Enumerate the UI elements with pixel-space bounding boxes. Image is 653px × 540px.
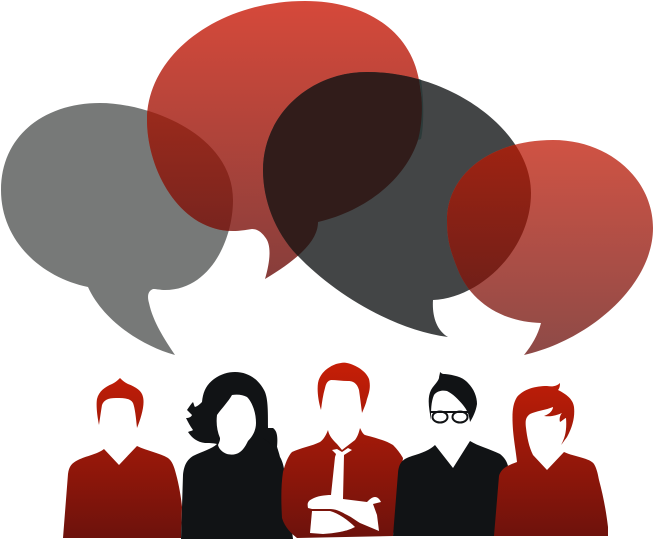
face <box>217 395 256 455</box>
body <box>63 446 182 538</box>
person 5: woman with red hair <box>494 383 608 536</box>
hair <box>318 363 370 413</box>
body <box>393 441 508 536</box>
hair <box>97 378 144 428</box>
overlap: dark and red bubbles <box>263 72 422 256</box>
overlap sliver at red bubble edge <box>418 79 423 140</box>
person 3: man with crossed arms and tie <box>281 363 403 538</box>
shirt, tie and upper arm <box>308 448 381 531</box>
glasses <box>431 412 469 422</box>
speech bubble: grey left <box>1 103 233 355</box>
overlap: dark and right red bubbles <box>447 144 531 290</box>
hair-to-shoulder gap <box>263 438 278 451</box>
person 2: woman with black hair <box>181 372 293 539</box>
silhouette <box>181 372 293 539</box>
body <box>281 428 403 538</box>
hair <box>429 372 477 422</box>
speech bubble: dark centre <box>263 72 531 337</box>
speech bubble: red right <box>447 140 653 355</box>
speech bubble: red top <box>147 1 423 279</box>
lower arm <box>310 511 355 534</box>
overlap: grey and red bubbles <box>147 110 233 231</box>
person 1: man in red sweater <box>63 378 182 538</box>
person 4: man with glasses <box>393 372 508 536</box>
